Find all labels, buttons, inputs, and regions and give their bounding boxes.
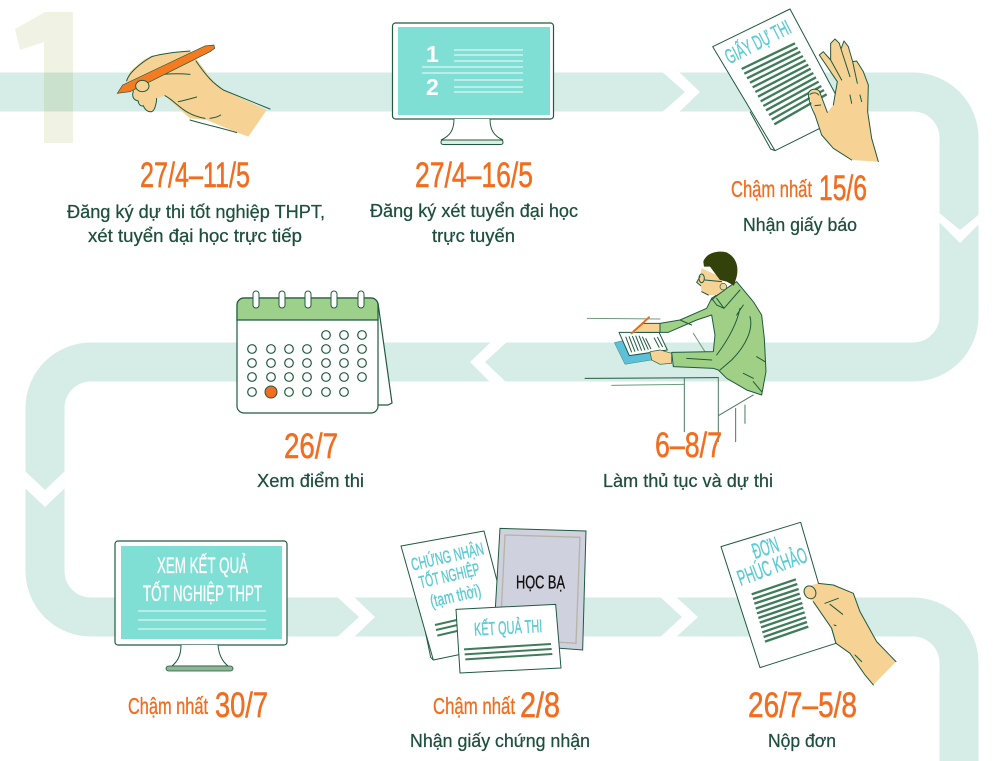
date: 26/7: 26/7 — [284, 427, 338, 466]
date: 2/8: 2/8 — [520, 686, 560, 725]
icon: hand holding exam notice — [713, 9, 878, 162]
date: 27/4-11/5: 27/4–11/5 — [140, 156, 250, 195]
icon: certificates and transcript: HỌC BẠ — [516, 571, 565, 592]
icon: monitor with results: TỐT NGHIỆP THPT — [143, 580, 262, 606]
icon: monitor with list: 1 — [426, 41, 439, 67]
description: step 1: Đăng ký dự thi tốt nghiệp THPT, — [67, 202, 325, 222]
date: 15/6: 15/6 — [819, 169, 867, 208]
icon: hand writing with pen — [117, 45, 270, 137]
description: step 2 line 2: trực tuyến — [432, 226, 515, 246]
icon: monitor with results: XEM KẾT QUẢ — [157, 553, 248, 578]
big step number 1 — [15, 12, 73, 143]
description: step 3: Nhận giấy báo — [743, 215, 857, 235]
description: step 4: Làm thủ tục và dự thi — [603, 471, 773, 491]
icon: monitor with list: 2 — [426, 74, 439, 100]
date: 26/7-5/8: 26/7–5/8 — [748, 686, 857, 725]
icon: certificates and transcript: TỐT NGHIỆP — [417, 559, 482, 592]
description: step 5: Xem điểm thi — [257, 471, 364, 491]
icon: certificates and transcript: (tạm thời) — [428, 580, 483, 611]
date: 6-8/7: 6–8/7 — [655, 426, 722, 465]
description: step 7: Nhận giấy chứng nhận — [410, 731, 590, 751]
description: step 1 line 2: xét tuyển đại học trực tiếp — [88, 226, 302, 246]
label: Chậm nhất: Chậm nhất — [433, 693, 515, 719]
label: Chậm nhất: Chậm nhất — [128, 693, 208, 719]
description: step 2: Đăng ký xét tuyển đại học — [370, 201, 578, 221]
icon: hand holding appeal form — [721, 522, 896, 685]
description: step 8: Nộp đơn — [768, 731, 836, 751]
date: 27/4-16/5: 27/4–16/5 — [415, 156, 533, 195]
label: Chậm nhất: Chậm nhất — [731, 176, 812, 202]
icon: certificates and transcript — [401, 528, 586, 673]
icon: monitor with list — [392, 23, 554, 144]
icon: monitor with results — [115, 541, 287, 671]
icon: calendar — [237, 291, 392, 413]
icon: hand holding appeal form: ĐƠN — [749, 532, 782, 564]
icon: hand holding appeal form: PHÚC KHẢO — [734, 542, 811, 591]
icon: student at desk — [585, 252, 766, 442]
icon: certificates and transcript: KẾT QUẢ THI — [473, 615, 543, 640]
icon: certificates and transcript: CHỨNG NHẬN — [409, 538, 486, 575]
date: 30/7: 30/7 — [215, 686, 268, 725]
